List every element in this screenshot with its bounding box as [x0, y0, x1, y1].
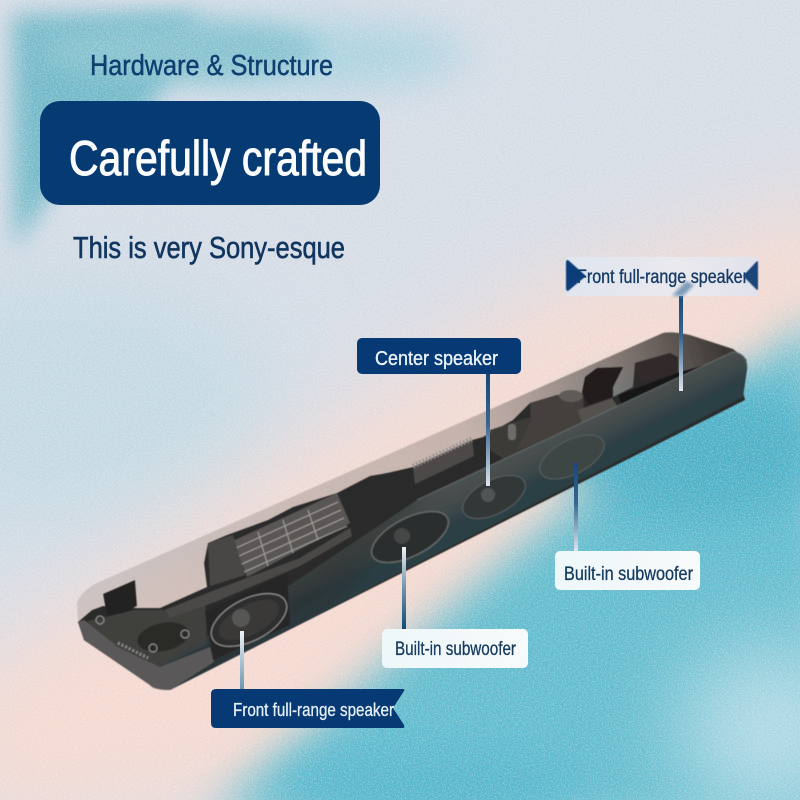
label: front full-range speaker, bottom left: [211, 689, 404, 728]
leader line: center speaker: [486, 374, 490, 486]
connector header: [578, 398, 618, 424]
heat sink: [413, 440, 474, 484]
main circuit board assembly: [233, 493, 350, 577]
long rail behind the driver: [165, 528, 352, 618]
title banner: [40, 101, 380, 205]
connector bracket: [582, 367, 623, 405]
woofer recess on the floor: [135, 618, 191, 656]
rear right rail: [618, 365, 705, 406]
label: center speaker: [357, 338, 521, 374]
board side bracket: [208, 535, 245, 586]
front wall: [150, 352, 747, 690]
vent holes strip: [118, 643, 148, 658]
subheading: This is very Sony-esque: [73, 230, 345, 265]
subwoofer driver, right: [533, 426, 611, 488]
left end outer wall: [78, 620, 214, 690]
label: front full-range speaker, top right: Front full-range speaker: [577, 267, 749, 288]
floor of the left end: [84, 596, 207, 667]
label: built-in subwoofer, left: [382, 629, 528, 668]
leader line: front speaker right: [679, 292, 683, 391]
interior mass of components: [78, 352, 745, 690]
leader line: front speaker left: [240, 631, 244, 689]
leader line: left subwoofer: [402, 547, 406, 629]
mounting rings: [96, 616, 189, 652]
leader line: right subwoofer: [574, 463, 578, 551]
label: center speaker: Center speaker: [375, 348, 498, 370]
subwoofer driver, centre left: [364, 501, 456, 573]
rear right block: [635, 353, 678, 382]
front full-range driver, left: [203, 573, 295, 660]
soundbar translucent upper shell: [77, 332, 747, 690]
label: built-in subwoofer, right: Built-in subwoofer: [564, 564, 694, 585]
title banner: Carefully crafted: [69, 132, 367, 186]
label: built-in subwoofer, right: [555, 551, 700, 590]
circuit board grid: [236, 502, 347, 572]
label: front full-range speaker, top right: [566, 257, 758, 296]
centre speaker driver: [456, 466, 532, 528]
soundbar product illustration: [77, 332, 747, 690]
left wall tab: [103, 580, 137, 621]
capacitor cluster: [490, 417, 545, 460]
heading: hardware and structure: Hardware & Structure: [90, 50, 333, 82]
capacitor: [508, 424, 516, 440]
label: built-in subwoofer, left: Built-in subwoofer: [395, 639, 517, 660]
wall highlight edge: [417, 352, 747, 500]
transformer block: [517, 395, 585, 450]
round capacitor: [559, 390, 583, 402]
label: front full-range speaker, bottom left: Front full-range speaker: [233, 699, 394, 720]
